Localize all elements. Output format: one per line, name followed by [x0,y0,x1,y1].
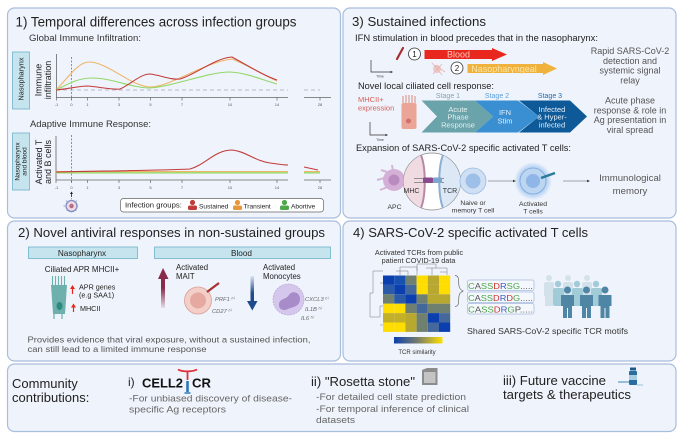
TCR motif sequences: CASSDRDG..... [468,293,533,303]
item iii heading [503,374,631,402]
color bar [394,337,442,344]
heading: panel 4: 4) SARS-CoV-2 specific activated T cells [353,225,588,240]
item i: Cell2TCR logo: i) [128,375,135,389]
icon: MAIT cell [184,283,219,314]
arrow: nasopharyngeal [468,62,557,75]
diagram: MHC and TCR synapse [404,153,460,210]
chart: activated T and B cells: 3 [118,185,121,190]
subheading: IFN stimulation: IFN stimulation in blood precedes that in the nasopharynx: [355,33,598,43]
stage 3 chevron: Stage 3 [538,93,562,100]
time axis 2: Time [376,138,384,142]
side note: acute phase response: Ag presentation in [594,115,666,125]
arrow: to memory [563,180,590,182]
label: nasopharynx [12,52,30,109]
chart: activated T and B cells: 0 [70,185,73,190]
stage 1 chevron: Stage 1 [436,93,460,100]
label: activated MAIT: MAIT [176,272,195,281]
cell labels: memory T cell [452,208,495,214]
item i description [129,394,292,416]
side note: acute phase response: response & role in [594,106,666,116]
icon: rosetta stone [422,368,438,385]
caption: activated TCRs: patient COVID-19 data [382,256,456,265]
axis label: immune infiltration: Immune [34,64,44,96]
arrow: blood: Blood [447,50,470,60]
heading: community contributions: Community [12,376,78,391]
stage 2 chevron [475,93,539,132]
header: nasopharynx: Nasopharynx [58,249,106,258]
text block: evidence statement: can still lead to a limited immune response [28,344,207,354]
stage 1 chevron: Acute [448,105,468,114]
stage 3 chevron: & Hyper- [537,112,567,122]
item i: Cell2TCR logo [128,370,211,393]
item iii heading: targets & therapeutics [503,388,631,402]
item ii description: datasets [316,415,355,426]
stage 3 chevron: infected [539,120,565,130]
icon: APC spiky cell [377,165,405,191]
header: blood [154,247,330,258]
chart: immune infiltration: 28 [318,102,323,107]
caption: activated TCRs: Activated TCRs from public [375,248,463,257]
brace [455,276,463,306]
icon: teal ciliated cell [51,276,67,319]
step marker 2 [451,62,463,74]
red arrows and gene labels [70,282,116,313]
axis label: immune infiltration: infiltration [43,61,53,99]
heading: community contributions: contributions: [12,390,89,405]
gene labels: MAIT: PRF1 ʰⁱ [215,296,235,303]
chart: immune infiltration: 0 [70,102,73,107]
item ii description: -For detailed cell state prediction [316,392,466,403]
chart: immune infiltration [55,54,331,107]
header: blood: Blood [231,249,252,258]
chart: activated T and B cells: 5 [149,185,152,190]
icon: nasopharyngeal swab cell [432,63,445,75]
step marker 1: 1 [412,50,417,59]
item ii description [316,392,469,426]
chart: activated T and B cells: -1 [55,185,59,190]
gene labels: monocytes: CXCL3 ʰⁱ [305,296,329,303]
subheading: ciliated cell response: Novel local ciliated cell response: [358,81,494,91]
label: activated MAIT: Activated [176,263,208,272]
arrow: MAIT up [158,268,168,308]
text block: evidence statement: Provides evidence that viral exposure, without a sustained infection, [28,334,310,344]
icon: activated T cell [514,162,555,200]
chart: activated T and B cells: 1 [86,185,89,190]
time axis 1: Time [376,74,384,78]
caption: TCR similarity: TCR similarity [398,350,436,356]
arrow: to activated T cells [488,180,516,182]
side note: rapid detection: detection and [603,56,657,66]
label: activated monocytes: Activated [263,263,295,272]
label: activated monocytes: Monocytes [263,272,301,281]
chart: immune infiltration: 14 [275,102,280,107]
icon: naive T cell [460,168,486,194]
label: nasopharynx and blood [12,133,30,190]
diagram: MHC and TCR synapse: TCR [443,188,457,195]
arrow: nasopharyngeal: Nasopharyngeal [471,64,537,74]
side note: acute phase response: Acute phase [605,96,655,106]
chart: immune infiltration: 1 [86,102,89,107]
arrow: monocytes down [247,276,258,310]
stage 2 chevron: IFN [499,108,511,117]
arrow: blood [424,48,507,61]
label: nasopharynx and blood: and blood [22,147,28,176]
header: nasopharynx [28,247,138,258]
legend: infection groups: Abortive [291,204,316,210]
chart: immune infiltration: 7 [181,102,184,107]
legend: infection groups: Sustained [199,204,229,210]
stage 3 chevron: Infected [539,105,565,114]
gene labels: monocytes: IL6 ʰⁱ [301,315,314,322]
chart: activated T and B cells: 7 [181,185,184,190]
label: ciliated APR MHCII+: Ciliated APR MHCII+ [45,265,120,274]
icon: ciliated cell [402,95,416,129]
text block: evidence statement [28,334,310,354]
panel 3: sustained infections [343,8,676,218]
stage 3 chevron [519,93,587,132]
TCR motif sequences: CASSDRGP..... [468,304,533,314]
time axis 2 [370,122,388,142]
chart: immune infiltration: 10 [228,102,233,107]
heading: panel 1: 1) Temporal differences across infection groups [16,14,297,30]
TCR motif sequences: CASSDRSG..... [468,281,533,291]
chart: activated T and B cells: 14 [275,185,280,190]
cell labels: T cells [523,208,543,216]
item ii heading: ii) "Rosetta stone" [311,375,415,389]
chart: activated T and B cells [55,135,331,190]
heading: panel 3: 3) Sustained infections [352,14,487,29]
panel 1: temporal differences [8,8,340,218]
side note: rapid detection: systemic signal [599,66,661,76]
subheading: adaptive immune response: Adaptive Immune Response: [30,119,151,129]
heading: panel 2: 2) Novel antiviral responses in non-sustained groups [18,225,326,240]
diagram: MHC and TCR synapse: MHC [404,188,419,195]
axis label: activated T and B cells: and B cells [43,139,53,184]
item iii heading: iii) Future vaccine [503,374,606,388]
chart: activated T and B cells: 10 [228,185,233,190]
subheading: T cell expansion: Expansion of SARS-CoV-2 specific activated T cells: [356,143,571,153]
red arrows and gene labels: MHCII [80,304,100,313]
axis label: activated T and B cells: Activated T [34,139,44,184]
item i description: -For unbiased discovery of disease- [129,394,292,404]
step marker 2: 2 [455,64,460,73]
time axis 1 [371,60,393,78]
icon: syringe [397,48,403,59]
panel: community contributions [8,364,676,432]
chart: immune infiltration: 3 [118,102,121,107]
gene labels: MAIT: CD27 ʰⁱ [212,308,232,315]
heatmap: TCR similarity [383,276,450,332]
item i: Cell2TCR logo: CELL2 [142,376,183,390]
label: MHCII+ expression: MHCII+ [358,95,384,104]
stage 2 chevron: Stim [498,116,512,126]
subheading: global immune infiltration: Global Immune Infiltration: [29,33,141,43]
label: immunological memory: Immunological [599,173,661,184]
stage 2 chevron: Stage 2 [485,93,509,100]
legend: infection groups [120,198,324,212]
label: MHCII+ expression: expression [358,104,394,112]
step marker 1 [408,48,420,60]
label: immunological memory: memory [613,186,648,197]
label: nasopharynx: Nasopharynx [16,57,26,100]
icon: vaccine vial and syringe [618,368,643,385]
icon: group of people [544,275,612,318]
dendrograms [370,264,447,325]
side note: rapid detection: relay [620,76,640,86]
cell labels: Naive or [460,200,486,207]
stage 1 chevron [422,93,493,132]
item i: Cell2TCR logo: CR [192,376,211,390]
label: nasopharynx and blood: Nasopharynx [14,142,22,181]
TCR motif sequences [468,280,534,314]
red arrows and gene labels: (e.g SAA1) [79,290,114,300]
red arrows and gene labels: APR genes [79,282,116,292]
legend: infection groups: Infection groups: [125,200,182,210]
chart: activated T and B cells: 28 [318,185,323,190]
side note: acute phase response: viral spread [607,125,653,135]
gene labels: monocytes: IL1B ʰⁱ [305,306,322,313]
item i description: specific Ag receptors [129,404,226,416]
panel 2: novel antiviral responses [8,221,340,361]
panel 4: SARS-CoV-2 specific activated T cells [343,221,676,361]
icon: monocyte [273,284,304,315]
cell labels: Activated [519,201,547,208]
item ii description: -For temporal inference of clinical [316,404,469,415]
chart: immune infiltration: -1 [55,102,59,107]
icon: virus with exposure arrow [64,192,80,214]
cell labels: APC [388,204,402,211]
side note: rapid detection: Rapid SARS-CoV-2 [591,46,669,56]
stage 1 chevron: Response [441,120,475,130]
legend: infection groups: Transient [244,204,271,210]
caption: shared TCR motifs: Shared SARS-CoV-2 specific TCR motifs [467,326,628,336]
chart: immune infiltration: 5 [149,102,152,107]
stage 1 chevron: Phase [447,112,469,122]
